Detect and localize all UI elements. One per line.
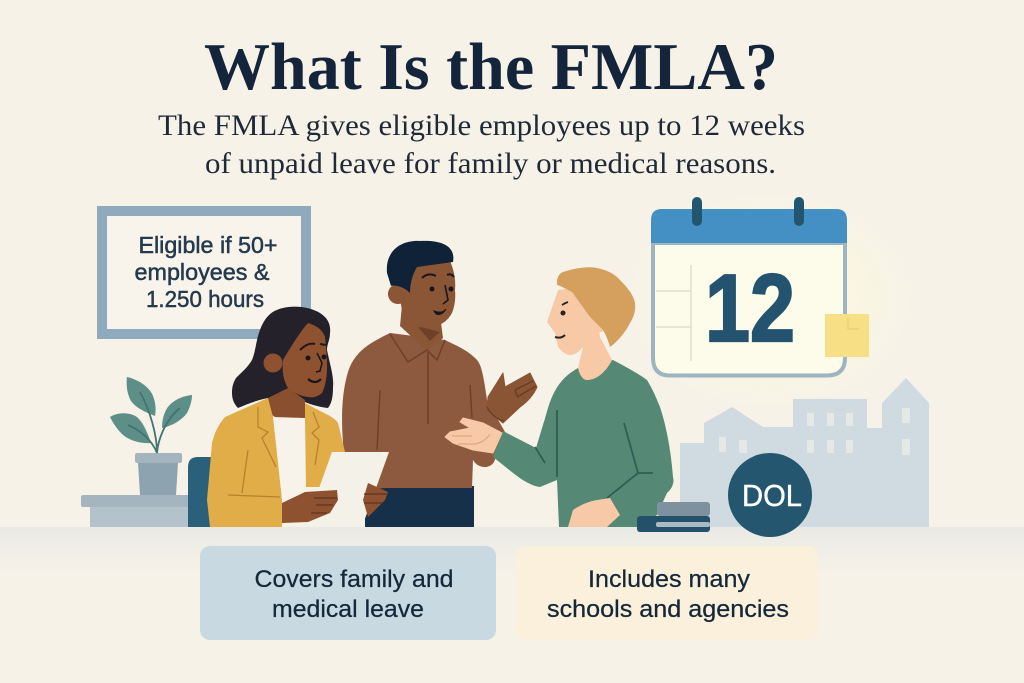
eligibility sign: Eligible if 50+ <box>138 232 278 258</box>
subtitle <box>158 109 805 180</box>
callout: schools and agencies: schools and agencies <box>547 596 789 623</box>
government buildings <box>680 378 929 527</box>
callout: family and medical leave: medical leave <box>272 596 424 623</box>
subtitle: of unpaid leave for family or medical reasons. <box>205 147 776 180</box>
subtitle: The FMLA gives eligible employees up to 12 weeks <box>158 109 805 142</box>
callout: family and medical leave <box>200 546 496 640</box>
stacked books <box>637 502 710 532</box>
callout: schools and agencies: Includes many <box>588 566 750 593</box>
paper document <box>305 452 389 527</box>
woman's hands <box>282 483 388 523</box>
title: What Is the FMLA? <box>204 30 778 104</box>
calendar showing 12: 12 <box>705 255 795 362</box>
eligibility sign <box>102 211 306 334</box>
sticky note <box>825 314 869 357</box>
DOL badge <box>728 453 812 537</box>
gesturing brown hand <box>487 373 537 423</box>
open palm hand <box>445 418 502 453</box>
calendar showing 12 <box>651 197 869 376</box>
callout: schools and agencies <box>516 546 818 640</box>
eligibility sign: 1.250 hours <box>146 286 264 312</box>
plant on side table <box>81 377 192 527</box>
person: woman in yellow jacket <box>207 307 389 527</box>
DOL badge: DOL <box>742 478 802 513</box>
resting hand <box>568 498 620 527</box>
chair <box>188 457 212 527</box>
person: man in brown shirt <box>342 241 537 527</box>
person: man in green sweater <box>445 267 673 527</box>
callout: family and medical leave: Covers family and <box>254 566 454 593</box>
eligibility sign: employees & <box>134 259 270 285</box>
